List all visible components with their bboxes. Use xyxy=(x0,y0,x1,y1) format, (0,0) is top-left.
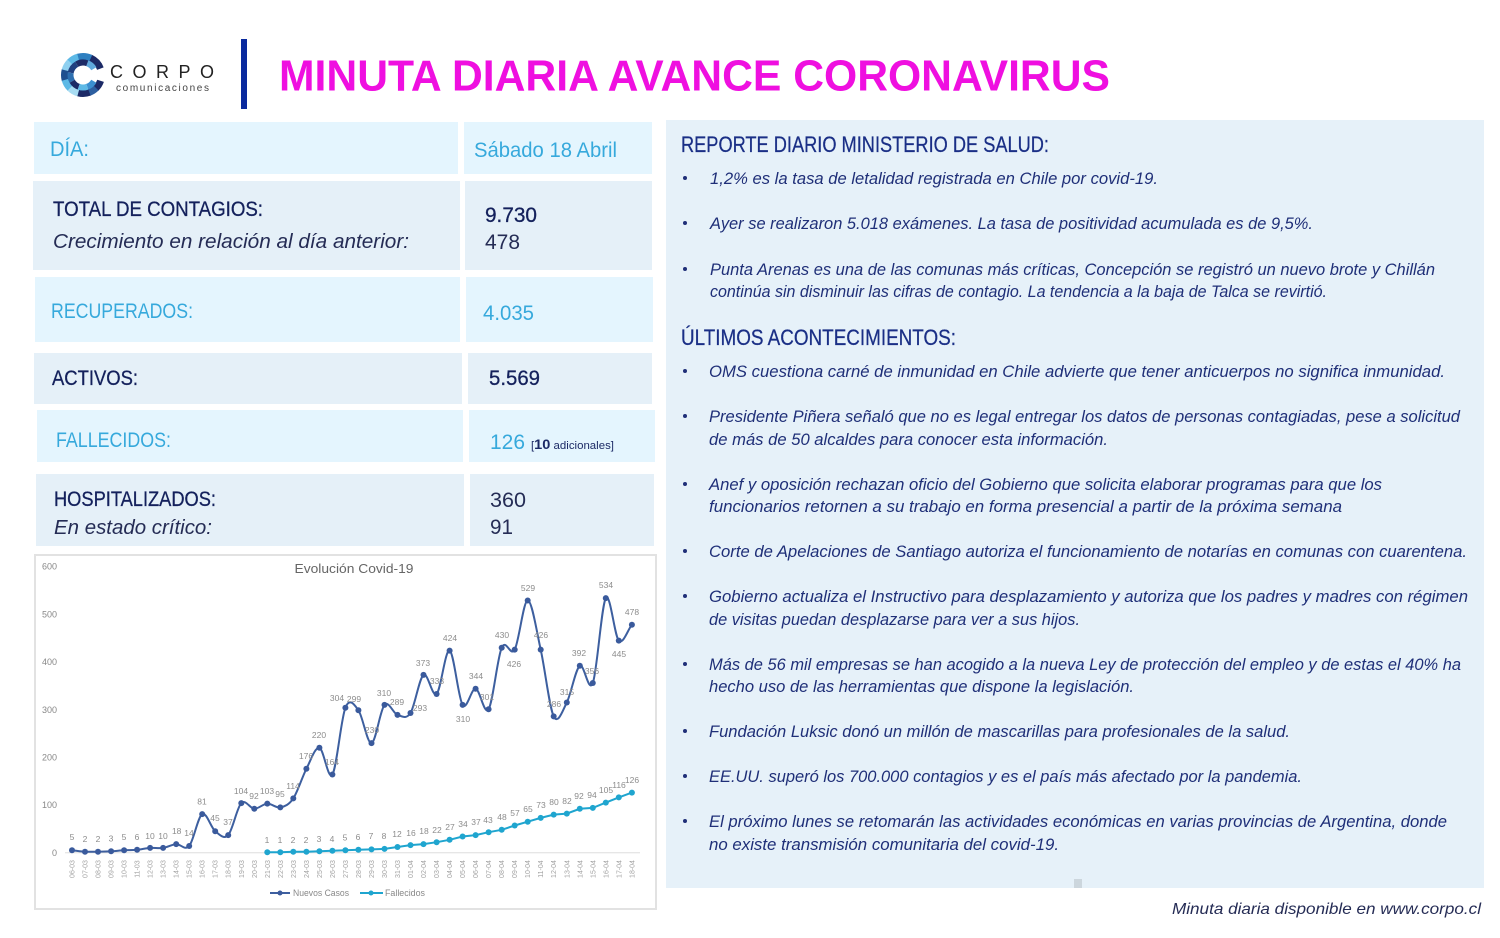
data labels: fallecidos: 105 xyxy=(599,785,613,795)
data labels: fallecidos: 65 xyxy=(523,804,533,814)
row: fallecidos xyxy=(37,410,655,462)
x axis date labels: 18-04 xyxy=(629,860,636,878)
list: últimos acontecimientos: de visitas puedan desplazarse para ver a sus hijos. xyxy=(709,611,1080,629)
row: fallecidos: 126 xyxy=(490,431,525,454)
data labels: fallecidos: 34 xyxy=(458,819,468,829)
list: reporte diario: 1,2% es la tasa de letalidad registrada en Chile por covid-19. xyxy=(710,170,1158,188)
data labels: fallecidos: 7 xyxy=(369,831,374,841)
x axis date labels: 09-03 xyxy=(109,860,116,878)
list: últimos acontecimientos: EE.UU. superó los 700.000 contagios y es el país más afectado por la pandemia. xyxy=(709,768,1302,786)
data labels: nuevos casos: 164 xyxy=(325,757,339,767)
row: hospitalizados: HOSPITALIZADOS: xyxy=(54,488,216,511)
data labels: nuevos casos: 333 xyxy=(430,676,444,686)
list: reporte diario: Ayer se realizaron 5.018 exámenes. La tasa de positividad acumulada es de 9,5%. xyxy=(709,215,1313,233)
series: nuevos casos xyxy=(72,597,632,852)
row: hospitalizados: En estado crítico: xyxy=(54,517,212,539)
y axis labels: 100 xyxy=(42,800,57,810)
data labels: nuevos casos: 315 xyxy=(560,687,574,697)
x axis date labels: 05-04 xyxy=(460,860,467,878)
x axis date labels: 18-03 xyxy=(226,860,233,878)
row: total de contagios: 9.730 xyxy=(485,204,537,227)
data labels: nuevos casos: 529 xyxy=(521,583,535,593)
list: últimos acontecimientos: no existe transmisión comunitaria del covid-19. xyxy=(709,836,1059,854)
row: recuperados: 4.035 xyxy=(483,302,534,325)
list: últimos acontecimientos: Gobierno actualiza el Instructivo para desplazamiento y autoriza que los padres y madres con régimen xyxy=(709,588,1468,606)
data labels: fallecidos: 43 xyxy=(483,815,493,825)
x axis date labels: 23-03 xyxy=(291,860,298,878)
row: total de contagios: Crecimiento en relación al día anterior: xyxy=(53,231,409,253)
data labels: nuevos casos: 424 xyxy=(443,633,457,643)
row: hospitalizados: 360 xyxy=(490,489,526,512)
data labels: nuevos casos xyxy=(70,580,639,844)
x axis date labels: 02-04 xyxy=(421,860,428,878)
y axis labels: 500 xyxy=(42,610,57,620)
data labels: fallecidos: 1 xyxy=(265,835,270,845)
x axis date labels: 13-04 xyxy=(564,860,571,878)
data labels: nuevos casos: 95 xyxy=(275,789,285,799)
x axis date labels: 20-03 xyxy=(252,860,259,878)
x axis date labels: 11-03 xyxy=(135,860,142,878)
row: activos xyxy=(34,353,652,404)
footer note: Minuta diaria disponible en www.corpo.cl xyxy=(1172,901,1481,918)
row: recuperados xyxy=(35,277,653,342)
y axis labels: 0 xyxy=(52,848,57,858)
data labels: nuevos casos: 289 xyxy=(390,697,404,707)
list: últimos acontecimientos: Más de 56 mil empresas se han acogido a la nueva Ley de protección del empleo y de estas el 40% ha xyxy=(709,656,1461,674)
x axis date labels: 12-03 xyxy=(148,860,155,878)
logo: Corpo comunicaciones: CORPO xyxy=(110,62,214,82)
data labels: nuevos casos: 6 xyxy=(135,832,140,842)
data labels: nuevos casos: 286 xyxy=(547,699,561,709)
legend xyxy=(270,888,425,898)
data labels: fallecidos: 18 xyxy=(419,826,429,836)
data labels: nuevos casos: 2 xyxy=(96,834,101,844)
data labels: fallecidos: 94 xyxy=(587,790,597,800)
data labels: nuevos casos: 426 xyxy=(534,630,548,640)
x axis date labels: 30-03 xyxy=(382,860,389,878)
header divider bar xyxy=(241,39,247,109)
row: fallecidos: [10 adicionales] xyxy=(531,436,614,452)
x axis date labels: 10-04 xyxy=(525,860,532,878)
data labels: fallecidos: 8 xyxy=(382,831,387,841)
x axis date labels: 16-03 xyxy=(200,860,207,878)
data labels: nuevos casos: 3 xyxy=(109,834,114,844)
title: MINUTA DIARIA AVANCE CORONAVIRUS xyxy=(279,52,1110,100)
list: últimos acontecimientos: Anef y oposición rechazan oficio del Gobierno que solicita elaborar programas para que los xyxy=(708,476,1382,494)
x axis date labels: 27-03 xyxy=(343,860,350,878)
row: recuperados: RECUPERADOS: xyxy=(51,300,193,323)
x axis date labels: 26-03 xyxy=(330,860,337,878)
data labels: nuevos casos: 18 xyxy=(172,826,182,836)
data labels: fallecidos xyxy=(265,775,639,845)
data labels: nuevos casos: 293 xyxy=(413,703,427,713)
list: últimos acontecimientos: El próximo lunes se retomarán las actividades económicas en varias provincias de Argentina, donde xyxy=(709,813,1447,831)
data labels: nuevos casos: 299 xyxy=(347,694,361,704)
data labels: nuevos casos: 92 xyxy=(249,791,259,801)
list: últimos acontecimientos: OMS cuestiona carné de inmunidad en Chile advierte que tener anticuerpos no significa inmunidad. xyxy=(709,363,1445,381)
data labels: nuevos casos: 344 xyxy=(469,671,483,681)
data labels: fallecidos: 126 xyxy=(625,775,639,785)
x axis date labels: 06-04 xyxy=(473,860,480,878)
data labels: nuevos casos: 478 xyxy=(625,607,639,617)
data labels: nuevos casos: 5 xyxy=(70,832,75,842)
list: últimos acontecimientos: Corte de Apelaciones de Santiago autoriza el funcionamiento de notarías en comunas con cuarentena. xyxy=(709,543,1467,561)
x axis date labels: 15-04 xyxy=(590,860,597,878)
x axis date labels: 10-03 xyxy=(122,860,129,878)
legend: Nuevos Casos xyxy=(293,888,349,898)
data labels: fallecidos: 27 xyxy=(445,822,455,832)
data labels: nuevos casos: 10 xyxy=(158,831,168,841)
x axis date labels: 08-03 xyxy=(96,860,102,878)
x axis date labels: 31-03 xyxy=(395,860,402,878)
logo: Corpo comunicaciones xyxy=(57,49,214,101)
x axis date labels: 04-04 xyxy=(447,860,454,878)
list: reporte diario: continúa sin disminuir las cifras de contagio. La tendencia a la baja de Talca se revirtió. xyxy=(710,283,1327,301)
list: últimos acontecimientos: Fundación Luksic donó un millón de mascarillas para profesionales de la salud. xyxy=(709,723,1290,741)
data labels: nuevos casos: 45 xyxy=(210,813,220,823)
x axis date labels: 13-03 xyxy=(161,860,168,878)
data labels: nuevos casos: 81 xyxy=(197,797,207,807)
x axis date labels: 14-04 xyxy=(577,860,584,878)
list: últimos acontecimientos: funcionarios retornen a su trabajo en forma presencial a partir de la próxima semana xyxy=(709,498,1342,516)
row: hospitalizados: 91 xyxy=(490,516,513,539)
data labels: fallecidos: 1 xyxy=(278,835,283,845)
data labels: fallecidos: 16 xyxy=(406,828,416,838)
x axis date labels: 22-03 xyxy=(278,860,285,878)
y axis labels: 200 xyxy=(42,752,57,762)
data labels: fallecidos: 82 xyxy=(562,796,572,806)
data labels: fallecidos: 80 xyxy=(549,797,559,807)
data labels: nuevos casos: 373 xyxy=(416,658,430,668)
data labels: nuevos casos: 37 xyxy=(223,817,233,827)
x axis date labels: 07-03 xyxy=(82,860,90,878)
x axis date labels: 14-03 xyxy=(174,860,181,878)
panel: news xyxy=(666,120,1484,888)
row: activos: ACTIVOS: xyxy=(52,367,138,390)
data labels: fallecidos: 116 xyxy=(612,780,626,790)
data labels: fallecidos: 22 xyxy=(432,825,442,835)
data labels: nuevos casos: 220 xyxy=(312,730,326,740)
row: día: DÍA: xyxy=(50,138,89,161)
data labels: nuevos casos: 14 xyxy=(184,828,194,838)
y axis labels: 600 xyxy=(42,562,57,572)
data labels: nuevos casos: 445 xyxy=(612,649,626,659)
logo: Corpo comunicaciones: comunicaciones xyxy=(116,83,209,94)
x axis date labels: 16-04 xyxy=(603,860,610,878)
row: hospitalizados xyxy=(36,474,654,546)
row: día xyxy=(34,122,652,174)
x axis date labels: 06-03 xyxy=(70,860,76,878)
x axis date labels: 01-04 xyxy=(408,860,415,878)
data labels: nuevos casos: 392 xyxy=(572,648,586,658)
data labels: fallecidos: 12 xyxy=(392,829,402,839)
x axis date labels: 21-03 xyxy=(265,860,272,878)
data labels: nuevos casos: 356 xyxy=(585,666,599,676)
data labels: nuevos casos: 104 xyxy=(234,786,248,796)
data labels: fallecidos: 6 xyxy=(356,832,361,842)
x axis date labels: 03-04 xyxy=(434,860,441,878)
x axis date labels xyxy=(70,860,636,878)
line chart: Evolución Covid-19 xyxy=(35,555,656,909)
data labels: fallecidos: 3 xyxy=(317,834,322,844)
x axis date labels: 09-04 xyxy=(512,860,519,878)
row: total de contagios: TOTAL DE CONTAGIOS: xyxy=(53,198,263,221)
data labels: nuevos casos: 310 xyxy=(377,688,391,698)
x axis date labels: 12-04 xyxy=(551,860,558,878)
x axis date labels: 25-03 xyxy=(317,860,324,878)
list: últimos acontecimientos: hecho uso de las herramientas que dispone la legislación. xyxy=(709,678,1134,696)
y axis labels: 400 xyxy=(42,657,57,667)
y axis labels xyxy=(42,562,57,858)
x axis date labels: 17-04 xyxy=(616,860,623,878)
x axis date labels: 19-03 xyxy=(239,860,246,878)
heading: últimos acontecimientos: ÚLTIMOS ACONTECIMIENTOS: xyxy=(681,325,956,350)
series: fallecidos xyxy=(267,793,632,852)
data labels: fallecidos: 37 xyxy=(471,817,481,827)
data labels: fallecidos: 4 xyxy=(330,834,335,844)
x axis line xyxy=(65,852,640,854)
chart title: Evolución Covid-19 xyxy=(294,562,414,576)
row: día: Sábado 18 Abril xyxy=(474,139,617,162)
list: últimos acontecimientos: de más de 50 alcaldes para conocer esta información. xyxy=(709,431,1108,449)
data labels: nuevos casos: 534 xyxy=(599,580,613,590)
x axis date labels: 15-03 xyxy=(187,860,194,878)
data labels: fallecidos: 57 xyxy=(510,808,520,818)
x axis date labels: 29-03 xyxy=(369,860,376,878)
data labels: fallecidos: 73 xyxy=(536,800,546,810)
data labels: fallecidos: 2 xyxy=(291,835,296,845)
data labels: nuevos casos: 230 xyxy=(365,725,379,735)
x axis date labels: 24-03 xyxy=(304,860,311,878)
data labels: nuevos casos: 426 xyxy=(507,659,521,669)
data labels: nuevos casos: 430 xyxy=(495,630,509,640)
data labels: nuevos casos: 304 xyxy=(330,693,344,703)
list: últimos acontecimientos: Presidente Piñera señaló que no es legal entregar los datos de personas contagiadas, pese a solicitud xyxy=(709,408,1461,426)
data labels: nuevos casos: 10 xyxy=(145,831,155,841)
row: fallecidos: FALLECIDOS: xyxy=(56,429,171,452)
row: total de contagios: 478 xyxy=(485,231,520,254)
row: total de contagios xyxy=(33,181,652,270)
data labels: nuevos casos: 103 xyxy=(260,786,274,796)
x axis date labels: 08-04 xyxy=(499,860,506,878)
data labels: fallecidos: 92 xyxy=(574,791,584,801)
data labels: fallecidos: 48 xyxy=(497,812,507,822)
x axis date labels: 17-03 xyxy=(213,860,220,878)
x axis date labels: 11-04 xyxy=(538,860,545,878)
x axis date labels: 07-04 xyxy=(486,860,493,878)
data labels: nuevos casos: 2 xyxy=(83,834,88,844)
data labels: nuevos casos: 310 xyxy=(456,714,470,724)
data labels: fallecidos: 2 xyxy=(304,835,309,845)
data labels: nuevos casos: 301 xyxy=(480,692,494,702)
data labels: nuevos casos: 114 xyxy=(286,781,300,791)
list: reporte diario xyxy=(683,170,1435,301)
legend: Fallecidos xyxy=(385,888,425,898)
x axis date labels: 28-03 xyxy=(356,860,363,878)
data labels: fallecidos: 5 xyxy=(343,832,348,842)
data labels: nuevos casos: 5 xyxy=(122,832,127,842)
list: últimos acontecimientos xyxy=(683,363,1468,854)
list: reporte diario: Punta Arenas es una de las comunas más críticas, Concepción se registró un nuevo brote y Chillán xyxy=(710,261,1435,279)
y axis labels: 300 xyxy=(42,705,57,715)
data labels: nuevos casos: 176 xyxy=(299,751,313,761)
row: activos: 5.569 xyxy=(489,367,540,390)
heading: reporte diario: REPORTE DIARIO MINISTERIO DE SALUD: xyxy=(681,132,1049,157)
